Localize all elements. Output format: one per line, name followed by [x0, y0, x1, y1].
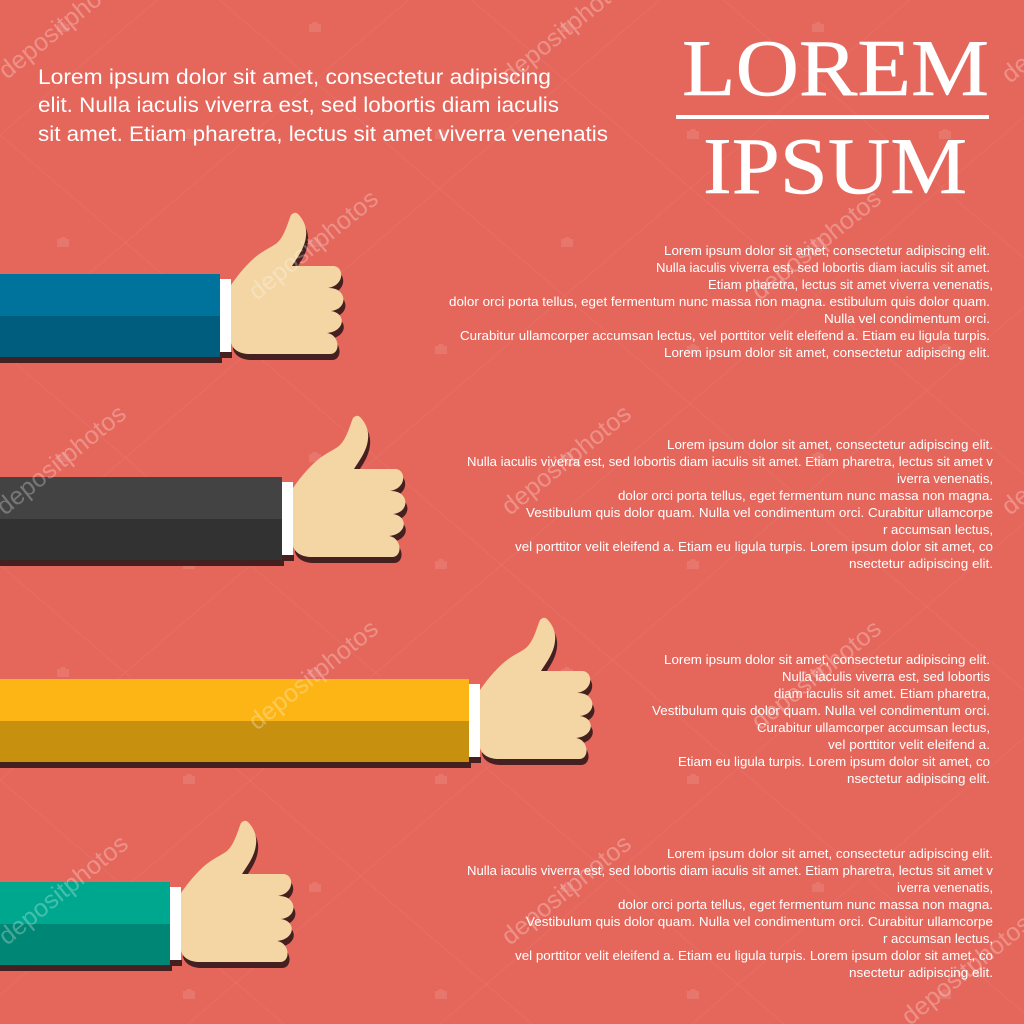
intro paragraph: sit amet. Etiam pharetra, lectus sit amet viverra venenatis [38, 122, 608, 146]
watermark text: depositphotos [496, 829, 637, 951]
text block 4: r accumsan lectus, [883, 932, 993, 946]
text block 4 [467, 847, 994, 980]
arm 2: charcoal sleeve thumbs up [0, 416, 407, 566]
watermark text: depositphotos [746, 184, 887, 306]
text block 4: iverra venenatis, [897, 881, 993, 895]
text block 1: Nulla iaculis viverra est, sed lobortis diam iaculis sit amet. [656, 261, 990, 275]
intro paragraph [38, 65, 608, 146]
arm 1: blue sleeve thumbs up [0, 213, 345, 363]
text block 4: nsectetur adipiscing elit. [849, 966, 993, 980]
text block 3: diam iaculis sit amet. Etiam pharetra, [774, 687, 990, 701]
text block 2: dolor orci porta tellus, eget fermentum nunc massa non magna. [618, 489, 993, 503]
text block 2: Vestibulum quis dolor quam. Nulla vel condimentum orci. Curabitur ullamcorpe [526, 506, 993, 520]
text block 3 [652, 653, 990, 786]
arm 3: yellow sleeve thumbs up [0, 618, 594, 768]
text block 1: Lorem ipsum dolor sit amet, consectetur adipiscing elit. [664, 244, 990, 258]
text block 1: Curabitur ullamcorper accumsan lectus, vel porttitor velit eleifend a. Etiam eu ligula turpis. [460, 329, 990, 343]
text block 2: r accumsan lectus, [883, 523, 993, 537]
text block 4: Nulla iaculis viverra est, sed lobortis diam iaculis sit amet. Etiam pharetra, lectus sit amet v [467, 864, 994, 878]
title [676, 23, 989, 211]
text block 1 [449, 244, 993, 360]
text block 1: Etiam pharetra, lectus sit amet viverra venenatis, [708, 278, 993, 292]
intro paragraph: Lorem ipsum dolor sit amet, consectetur adipiscing [38, 65, 551, 89]
text block 1: dolor orci porta tellus, eget fermentum nunc massa non magna. estibulum quis dolor quam. [449, 295, 990, 309]
text block 3: Etiam eu ligula turpis. Lorem ipsum dolor sit amet, co [678, 755, 990, 769]
arm 4: teal sleeve thumbs up [0, 821, 295, 971]
text block 3: Vestibulum quis dolor quam. Nulla vel condimentum orci. [652, 704, 990, 718]
title: IPSUM [703, 121, 967, 211]
text block 2: nsectetur adipiscing elit. [849, 557, 993, 571]
text block 3: Curabitur ullamcorper accumsan lectus, [757, 721, 990, 735]
title: LOREM [682, 23, 989, 113]
watermark text: depositphotos [746, 614, 887, 736]
text block 3: vel porttitor velit eleifend a. [828, 738, 990, 752]
text block 2: Lorem ipsum dolor sit amet, consectetur adipiscing elit. [667, 438, 993, 452]
text block 4: Vestibulum quis dolor quam. Nulla vel condimentum orci. Curabitur ullamcorpe [526, 915, 993, 929]
text block 3: nsectetur adipiscing elit. [847, 772, 990, 786]
text block 1: Nulla vel condimentum orci. [824, 312, 990, 326]
text block 4: Lorem ipsum dolor sit amet, consectetur adipiscing elit. [667, 847, 993, 861]
intro paragraph: elit. Nulla iaculis viverra est, sed lobortis diam iaculis [38, 93, 559, 117]
text block 3: Lorem ipsum dolor sit amet, consectetur adipiscing elit. [664, 653, 990, 667]
text block 2: vel porttitor velit eleifend a. Etiam eu ligula turpis. Lorem ipsum dolor sit amet, co [515, 540, 993, 554]
text block 4: vel porttitor velit eleifend a. Etiam eu ligula turpis. Lorem ipsum dolor sit amet, co [515, 949, 993, 963]
text block 2: Nulla iaculis viverra est, sed lobortis diam iaculis sit amet. Etiam pharetra, lectus sit amet v [467, 455, 994, 469]
text block 2 [467, 438, 994, 571]
watermark text: depositphotos [243, 614, 384, 736]
text block 2: iverra venenatis, [897, 472, 993, 486]
text block 4: dolor orci porta tellus, eget fermentum nunc massa non magna. [618, 898, 993, 912]
watermark text: depositphotos [496, 399, 637, 521]
text block 3: Nulla iaculis viverra est, sed lobortis [782, 670, 990, 684]
watermark text: depositphotos [243, 184, 384, 306]
text block 1: Lorem ipsum dolor sit amet, consectetur adipiscing elit. [664, 346, 990, 360]
